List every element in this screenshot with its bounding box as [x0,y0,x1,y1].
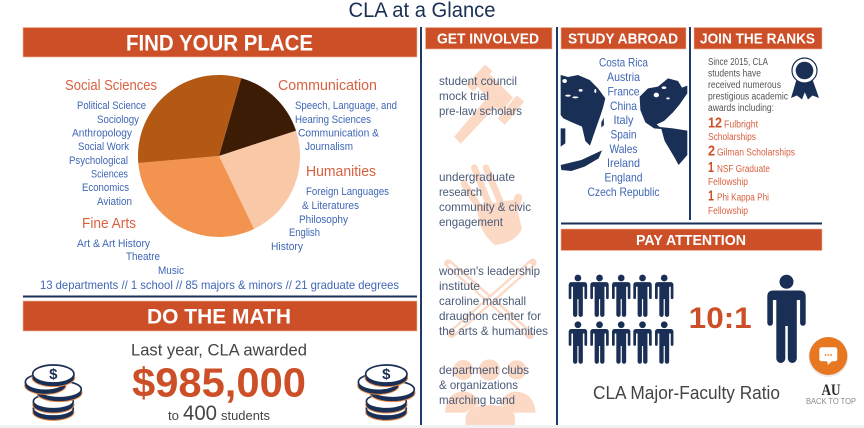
heading: get involved: GET INVOLVED [437,30,539,48]
list: communication: Communication & [298,128,380,140]
text: awards intro: students have [708,68,761,80]
list: awards [708,116,795,217]
text: leadership and arts [438,264,548,338]
list: awards: 12 [708,116,722,132]
text: awards intro [708,57,788,114]
text: leadership and arts: caroline marshall [439,294,526,308]
text: leadership and arts: draughon center for [439,309,541,323]
list: fine arts: Art & Art History [77,238,150,250]
panel: find your place [23,28,417,292]
panel: get involved [426,28,552,426]
icon: ten students [569,275,673,364]
text: student groups [439,74,522,118]
pie chart [138,75,300,237]
icon: gavel [455,65,524,143]
heading: pay attention [561,229,822,250]
summary stats line: 13 departments // 1 school // 85 majors & minors // 21 graduate degrees [40,278,399,292]
text: research and engagement: community & civic [439,200,531,214]
list: awards: 2 [708,144,715,160]
list: countries: France [608,84,640,98]
back to top link: AU [822,382,841,399]
back to top link: BACK TO TOP [806,396,856,406]
text: recipients: students [221,409,270,423]
list: fine arts [77,216,184,277]
list: humanities [271,164,389,253]
text: leadership and arts: the arts & humanities [439,324,548,338]
list: social sciences: Anthropology [72,128,132,140]
list: awards: Fellowship [708,206,748,217]
list: countries [588,56,660,199]
list: communication: Journalism [305,141,353,153]
list: social sciences: Aviation [97,196,132,208]
text: leadership and arts: women's leadership [438,264,540,278]
heading: do the math [23,301,417,331]
list: humanities: History [271,241,303,253]
heading: pay attention: PAY ATTENTION [636,232,746,249]
panel: join the ranks [694,28,822,217]
icon: one faculty member [767,275,806,363]
list: awards: 1 [708,188,714,204]
list: social sciences: Social Sciences [65,78,157,94]
list: social sciences: Social Work [78,141,129,153]
text: student groups: mock trial [439,89,489,103]
chat button [808,337,848,377]
list: fine arts: Fine Arts [82,216,136,232]
list: awards: Fulbright [724,120,758,130]
text: awards intro: awards including: [708,103,774,114]
list: social sciences: Political Science [77,100,146,112]
panel: do the math [23,301,417,425]
list: communication [278,78,397,153]
list: countries: Czech Republic [588,185,660,199]
heading: get involved [426,28,552,49]
heading: find your place: FIND YOUR PLACE [126,30,313,56]
list: countries: Ireland [607,156,640,170]
list: countries: England [604,170,642,184]
list: countries: China [610,99,637,113]
panel: pay attention [561,229,822,403]
text: clubs: marching band [439,393,515,407]
heading: study abroad: STUDY ABROAD [568,30,678,48]
icon: coins right: $ [382,366,391,383]
text: leadership and arts: institute [439,279,480,293]
list: awards: 1 [708,160,714,176]
list: social sciences: Sciences [91,168,128,180]
list: countries: Costa Rica [599,56,648,70]
figure: amount awarded: $985,000 [132,360,306,406]
list: social sciences: Psychological [69,155,128,167]
text: recipients: to [168,409,179,423]
text: clubs: department clubs [439,363,529,377]
list: social sciences: Sociology [97,114,139,126]
list: communication: Communication [278,78,377,94]
text: clubs [439,363,529,407]
caption: ratio: CLA Major-Faculty Ratio [593,383,780,403]
list: humanities: Humanities [306,164,376,180]
list: humanities: Philosophy [299,214,348,226]
list: countries: Wales [610,142,638,156]
list: social sciences [65,78,157,208]
text: student groups: student council [439,74,517,88]
list: fine arts: Music [158,265,184,277]
list: humanities: & Literatures [302,200,359,212]
text: awards intro: received numerous [708,80,781,91]
list: communication: Speech, Language, and [295,100,397,112]
list: countries: Spain [610,128,636,142]
text: research and engagement: undergraduate [439,170,515,184]
text: last year: Last year, CLA awarded [131,341,307,360]
icon: crossed pencils [448,263,533,335]
back to top link [806,382,856,406]
world map [561,75,687,171]
icon: award ribbon [791,58,819,100]
heading: do the math: DO THE MATH [147,306,291,329]
text: research and engagement [439,170,531,229]
text: awards intro: Since 2015, CLA [708,57,768,68]
list: communication: Hearing Sciences [295,114,371,126]
heading: find your place [23,28,417,57]
list: social sciences: Economics [82,182,129,194]
list: countries: Italy [614,113,634,127]
list: awards: NSF Graduate [717,164,770,175]
text: awards intro: prestigious academic [708,92,788,102]
panel: study abroad [561,28,687,199]
text: recipients [168,402,270,425]
text: clubs: & organizations [439,378,518,392]
list: awards: Gilman Scholarships [717,148,795,158]
text: student groups: pre-law scholars [439,104,522,118]
figure: ratio: 10:1 [689,302,752,335]
list: awards: Scholarships [708,132,756,143]
list: countries: Austria [607,70,640,84]
icon: coins left: $ [49,366,58,383]
list: awards: Fellowship [708,177,748,188]
list: fine arts: Theatre [126,251,160,263]
list: humanities: Foreign Languages [306,186,389,198]
icon: coins right [358,365,415,420]
icon: coins left [25,365,82,420]
heading: join the ranks: JOIN THE RANKS [700,30,815,48]
list: humanities: English [289,227,320,239]
text: research and engagement: research [439,185,482,199]
text: recipients: 400 [183,402,217,425]
list: awards: Phi Kappa Phi [717,192,769,204]
icon: group of people [445,359,536,426]
text: research and engagement: engagement [439,215,504,229]
icon: raised hand [464,168,522,245]
